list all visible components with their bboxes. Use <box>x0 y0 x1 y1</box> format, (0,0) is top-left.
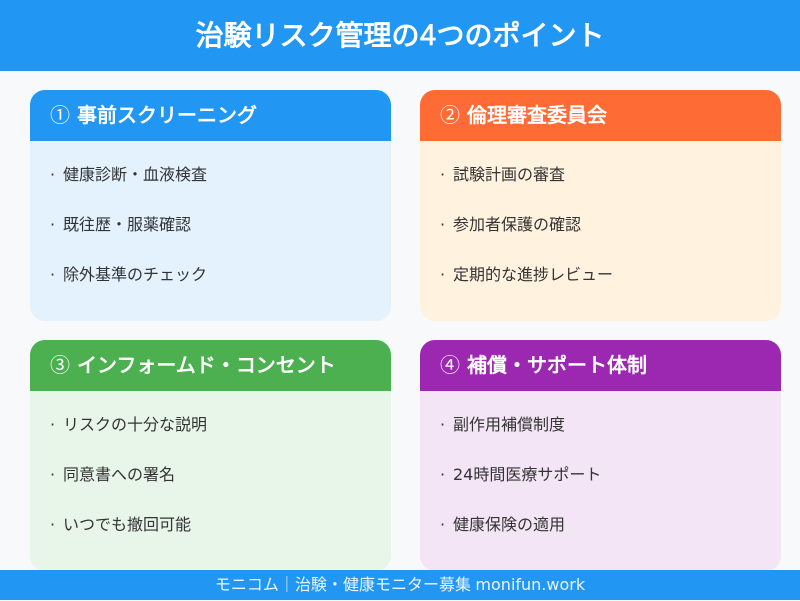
heading: 補償・サポート体制: 補償・サポート体制 <box>467 349 647 378</box>
panel: 倫理審査委員会 <box>420 90 781 321</box>
title: 治験リスク管理の4つのポイント <box>196 22 604 50</box>
footer: モニコム｜治験・健康モニター募集 monifun.work <box>215 571 585 595</box>
item: 除外基準: · <box>50 265 55 284</box>
item: 既往歴: 既往歴・服薬確認 <box>63 211 191 235</box>
heading: 倫理審査委員会: ② <box>440 99 460 128</box>
item: 24時間医療: · <box>440 465 445 484</box>
item: 24時間医療: 24時間医療サポート <box>453 465 601 484</box>
panel: インフォームド・コンセント <box>30 340 391 571</box>
item: 定期的な進捗: 定期的な進捗レビュー <box>453 267 613 283</box>
heading: インフォームド・コンセント: インフォームド・コンセント <box>77 349 336 378</box>
item: 試験計画: · <box>440 165 445 184</box>
item: 撤回: いつでも撤回可能 <box>63 517 191 533</box>
heading: 補償・サポート体制 <box>420 340 781 391</box>
item: 健康保険: 健康保険の適用 <box>453 517 565 533</box>
heading: インフォームド・コンセント: ③ <box>50 349 70 378</box>
item: 参加者保護: · <box>440 215 445 234</box>
item: 撤回: · <box>50 515 55 534</box>
heading: インフォームド・コンセント <box>30 340 391 391</box>
item: 参加者保護: 参加者保護の確認 <box>453 217 581 233</box>
title <box>0 0 800 71</box>
heading: 事前スクリーニング <box>30 90 391 141</box>
item: 試験計画: 試験計画の審査 <box>453 167 565 183</box>
panel: 補償・サポート体制 <box>420 340 781 571</box>
item: 健康保険: · <box>440 515 445 534</box>
item: 副作用補償: · <box>440 415 445 434</box>
item: リスク説明: リスクの十分な説明 <box>63 417 207 433</box>
panel: 事前スクリーニング <box>30 90 391 321</box>
item: 既往歴: · <box>50 215 55 234</box>
heading: 倫理審査委員会: 倫理審査委員会 <box>467 105 607 125</box>
item: 定期的な進捗: · <box>440 265 445 284</box>
heading: 事前スクリーニング: 事前スクリーニング <box>77 105 257 125</box>
item: 同意書: 同意書への署名 <box>63 467 175 483</box>
heading: 補償・サポート体制: ④ <box>440 349 460 378</box>
item: 同意書: · <box>50 465 55 484</box>
item: リスク説明: · <box>50 415 55 434</box>
item: 健康診断: 健康診断・血液検査 <box>63 161 207 185</box>
heading: 倫理審査委員会 <box>420 90 781 141</box>
item: 健康診断: · <box>50 165 55 184</box>
item: 副作用補償: 副作用補償制度 <box>453 417 565 433</box>
heading: 事前スクリーニング: ① <box>50 99 70 128</box>
item: 除外基準: 除外基準のチェック <box>63 267 207 283</box>
footer <box>0 570 800 600</box>
